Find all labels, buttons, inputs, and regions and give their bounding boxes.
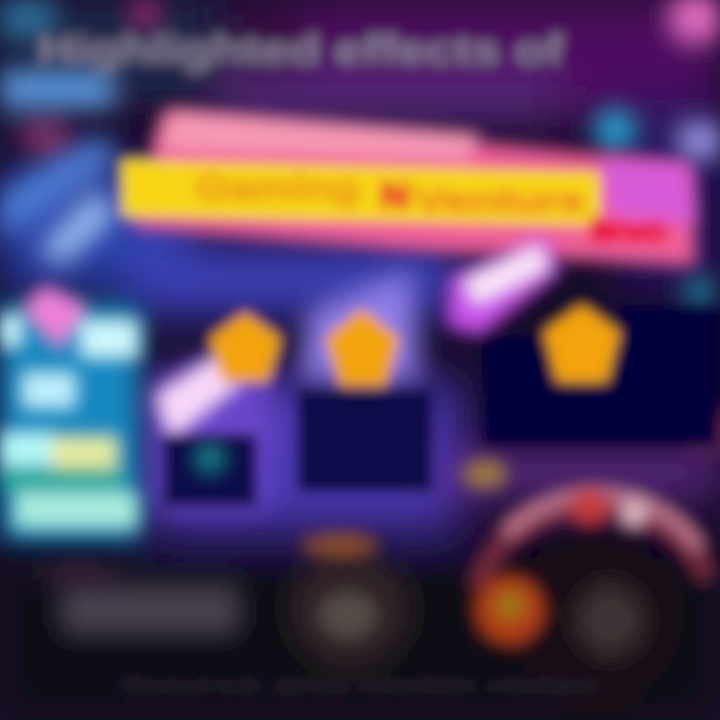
banner headline text bbox=[195, 167, 668, 248]
bottom chart 2 bbox=[288, 533, 412, 670]
roulette wheel bbox=[474, 490, 708, 705]
small gold chip bbox=[463, 460, 507, 488]
title line: Highlighted effects of bbox=[38, 26, 564, 73]
top left blue streaks bbox=[0, 0, 120, 265]
banner headline text: Gaming bbox=[195, 167, 360, 208]
bottom chart 1 bbox=[45, 565, 240, 635]
headline banner bbox=[122, 112, 695, 265]
card 2 bbox=[297, 270, 433, 492]
banner headline text: N bbox=[380, 175, 410, 216]
card 3 bbox=[482, 305, 720, 447]
icon: orange badge 2 bbox=[325, 308, 400, 386]
banner headline text: Venture bbox=[415, 182, 585, 220]
icon: orange badge 3 bbox=[544, 305, 620, 382]
banner yellow bar bbox=[122, 160, 600, 226]
card 1 bbox=[155, 312, 281, 510]
footer text: Source and footer notes bbox=[120, 675, 600, 697]
icon: orange badge 1 bbox=[210, 312, 281, 382]
left column cyan panel bbox=[0, 285, 140, 540]
pink tag bbox=[448, 235, 560, 335]
banner pink backing bbox=[130, 112, 695, 265]
top corner accents bbox=[131, 0, 720, 446]
banner headline text: Inc bbox=[590, 212, 668, 248]
